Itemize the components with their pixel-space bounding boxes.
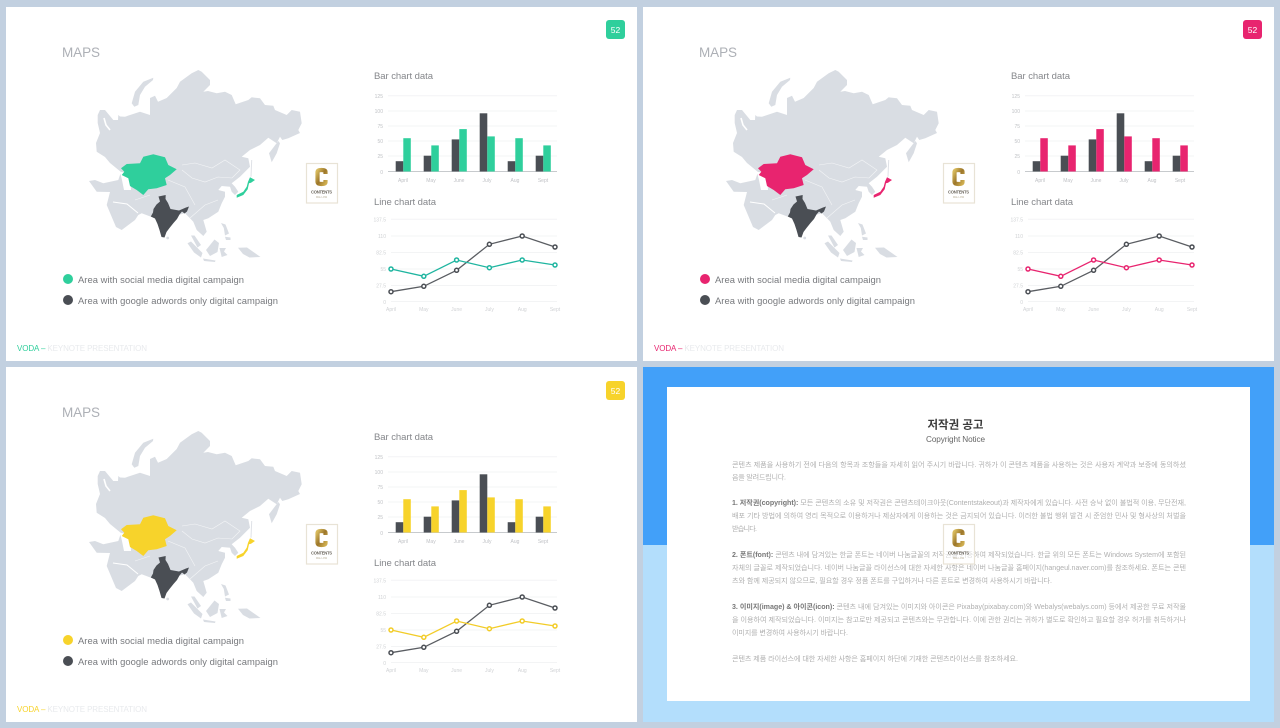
line chart: Line chart data xyxy=(1011,197,1074,208)
line chart: July xyxy=(485,668,494,674)
line chart: Sept xyxy=(550,307,561,313)
line chart: 137.5 xyxy=(373,218,386,224)
heading: copyright notice: Copyright Notice xyxy=(926,435,985,444)
bar chart: 75 xyxy=(377,124,383,130)
heading: MAPS: MAPS xyxy=(699,45,737,60)
bar chart: 75 xyxy=(377,485,383,491)
line chart xyxy=(1010,197,1198,313)
line chart: 0 xyxy=(383,661,386,667)
badge: page number xyxy=(1243,20,1262,39)
bar chart: Sept xyxy=(538,539,549,545)
text block: notice body: 음을 알려드립니다. xyxy=(732,472,786,482)
bar chart: 0 xyxy=(380,170,383,176)
heading: copyright notice: 저작권 공고 xyxy=(928,418,984,432)
logo: CONTENTS xyxy=(311,550,332,556)
text block: notice body: 받습니다. xyxy=(732,524,757,533)
bar chart: July xyxy=(483,539,492,545)
legend: Area with social media digital campaign xyxy=(78,635,244,646)
logo xyxy=(306,524,338,564)
map of Asia xyxy=(726,70,939,262)
panel: copyright notice xyxy=(643,367,1274,722)
bar chart xyxy=(374,71,557,184)
badge: page number xyxy=(606,20,625,39)
legend: Area with social media digital campaign xyxy=(78,274,244,285)
bar chart: Bar chart data xyxy=(1011,71,1071,82)
bar chart: 25 xyxy=(377,515,383,521)
map of Asia xyxy=(89,431,302,623)
line chart: Aug xyxy=(1155,307,1164,313)
panel: pink slide xyxy=(643,7,1274,361)
bar chart xyxy=(374,432,557,545)
footer: VODA – KEYNOTE PRESENTATION xyxy=(17,344,147,353)
line chart: 27.5 xyxy=(376,284,386,290)
logo: CONTENTS xyxy=(311,190,332,194)
logo: MAL LOW xyxy=(316,196,328,199)
legend xyxy=(700,274,915,306)
logo: CONTENTS xyxy=(948,190,969,194)
bar chart: Bar chart data xyxy=(374,71,434,82)
line chart xyxy=(373,558,561,674)
line chart: 27.5 xyxy=(376,644,386,650)
logo xyxy=(944,164,974,203)
line chart: June xyxy=(451,668,462,674)
text block: notice body: 자체의 글꼴로 제작되었습니다. 네이버 나눔글꼴 라이선스에 대한 자세한 사항은 네이버 나눔글꼴 홈페이지(hangeul.naver.com)를 참조하세요. 폰트는 콘텐 xyxy=(732,563,1186,572)
logo: MAL LOW xyxy=(953,196,965,199)
bar chart: April xyxy=(1035,178,1045,184)
bar chart: Sept xyxy=(538,178,549,184)
footer: VODA – KEYNOTE PRESENTATION xyxy=(17,705,147,714)
line chart: July xyxy=(1122,307,1131,313)
bar chart: 0 xyxy=(1017,170,1020,176)
bar chart: 125 xyxy=(375,455,383,461)
logo: MAL LOW xyxy=(316,557,328,560)
legend: Area with google adwords only digital campaign xyxy=(715,295,915,306)
bar chart: Sept xyxy=(1175,178,1186,184)
bar chart: Aug xyxy=(511,178,520,184)
panel: green slide xyxy=(6,7,637,361)
legend: Area with google adwords only digital campaign xyxy=(78,295,278,306)
line chart: 137.5 xyxy=(1010,218,1023,224)
badge: page number xyxy=(606,381,625,400)
bar chart: 50 xyxy=(377,139,383,145)
line chart: Sept xyxy=(1187,307,1198,313)
bar chart: May xyxy=(426,539,436,545)
line chart: 110 xyxy=(1015,234,1023,240)
bar chart: June xyxy=(454,178,465,184)
line chart: 55 xyxy=(380,628,386,634)
text block: notice body: 콘텐츠 제품 라이선스에 대한 자세한 사항은 홈페이지 하단에 기재한 콘텐츠라이선스를 참조하세요. xyxy=(732,654,1018,663)
logo xyxy=(306,164,338,203)
map of Asia xyxy=(89,70,302,262)
line chart: July xyxy=(485,307,494,313)
legend xyxy=(63,635,278,667)
panel: yellow slide xyxy=(6,367,637,722)
bar chart: 100 xyxy=(1012,109,1020,115)
bar chart: 75 xyxy=(1014,124,1020,130)
line chart: June xyxy=(451,307,462,313)
heading: MAPS: MAPS xyxy=(62,405,100,420)
line chart: 82.5 xyxy=(376,250,386,256)
line chart: Aug xyxy=(518,668,527,674)
bar chart: 125 xyxy=(375,94,383,100)
logo xyxy=(944,524,974,564)
bar chart: 50 xyxy=(1014,139,1020,145)
text block: notice body: 1. 저작권(copyright): 모든 콘텐츠의 소유 및 저작권은 콘텐츠테이크아웃(Contentstakeout)과 제작자에게 있습니다. 사전 승낙 없이 불법적 이용, 무단전재, xyxy=(732,498,1186,507)
bar chart: 25 xyxy=(1014,154,1020,160)
logo: MAL LOW xyxy=(953,557,965,560)
badge: page number: 52 xyxy=(611,25,620,35)
bar chart: July xyxy=(483,178,492,184)
badge: page number: 52 xyxy=(611,386,620,396)
logo: CONTENTS xyxy=(948,550,969,556)
line chart xyxy=(373,197,561,313)
bar chart: April xyxy=(398,178,408,184)
badge: page number: 52 xyxy=(1248,25,1257,35)
line chart: Sept xyxy=(550,668,561,674)
text block: notice body: 을 이용하여 제작되었습니다. 이미지는 참고로만 제공되고 콘텐츠와는 무관합니다. 이에 관한 권리는 귀하가 별도로 확인하고 필요할 경우 허가를 취득하거나 xyxy=(732,615,1186,624)
bar chart: Aug xyxy=(1148,178,1157,184)
line chart: April xyxy=(386,668,396,674)
text block: notice body: 배포 기타 방법에 의하여 영리 목적으로 이용하거나 제삼자에게 이용하는 것은 금지되어 있습니다. 이러한 불법 행위 발견 시 준엄한 민사 및 형사상의 처벌을 xyxy=(732,511,1186,520)
heading: MAPS: MAPS xyxy=(62,45,100,60)
text block: notice body: 2. 폰트(font): 콘텐츠 내에 담겨있는 한글 폰트는 네이버 나눔글꼴의 저작권을 기증하여 제작되었습니다. 한글 위의 모든 폰트는 Windows System에 포함된 xyxy=(732,550,1186,559)
bar chart: June xyxy=(1091,178,1102,184)
line chart: Line chart data xyxy=(374,197,437,208)
line chart: 55 xyxy=(380,267,386,273)
text block: notice body xyxy=(732,460,1186,663)
line chart: May xyxy=(419,307,429,313)
line chart: May xyxy=(419,668,429,674)
line chart: Aug xyxy=(518,307,527,313)
line chart: 110 xyxy=(378,234,386,240)
legend: Area with google adwords only digital campaign xyxy=(78,656,278,667)
line chart: 27.5 xyxy=(1013,284,1023,290)
text block: notice body: 이미지를 변경하여 사용하시기 바랍니다. xyxy=(732,628,848,637)
line chart: April xyxy=(386,307,396,313)
line chart: April xyxy=(1023,307,1033,313)
legend xyxy=(63,274,278,306)
bar chart: Bar chart data xyxy=(374,432,434,443)
bar chart: 50 xyxy=(377,500,383,506)
bar chart: 100 xyxy=(375,470,383,476)
bar chart: Aug xyxy=(511,539,520,545)
bar chart: July xyxy=(1120,178,1129,184)
text block: notice body: 3. 이미지(image) & 아이콘(icon): 콘텐츠 내에 담겨있는 이미지와 아이콘은 Pixabay(pixabay.com)와 Webalys(webalys.com) 등에서 제공한 무료 저작물 xyxy=(732,602,1186,611)
legend: Area with social media digital campaign xyxy=(715,274,881,285)
line chart: Line chart data xyxy=(374,558,437,569)
bar chart: 125 xyxy=(1012,94,1020,100)
line chart: 0 xyxy=(383,300,386,306)
bar chart: 0 xyxy=(380,531,383,537)
text block: notice body: 콘텐츠 제품을 사용하기 전에 다음의 항목과 조항들을 자세히 읽어 주시기 바랍니다. 귀하가 이 콘텐츠 제품을 사용하는 것은 사용자 계약과 보증에 동의하셨 xyxy=(732,460,1186,469)
bar chart: May xyxy=(426,178,436,184)
line chart: 0 xyxy=(1020,300,1023,306)
bar chart xyxy=(1011,71,1194,184)
text block: notice body: 츠와 함께 제공되지 않으므로, 필요할 경우 정품 폰트를 구입하거나 다른 폰트로 변경하여 사용하시기 바랍니다. xyxy=(732,576,1052,585)
line chart: 82.5 xyxy=(1013,250,1023,256)
heading: copyright notice xyxy=(926,418,985,444)
line chart: May xyxy=(1056,307,1066,313)
bar chart: April xyxy=(398,539,408,545)
line chart: June xyxy=(1088,307,1099,313)
bar chart: 100 xyxy=(375,109,383,115)
bar chart: 25 xyxy=(377,154,383,160)
line chart: 137.5 xyxy=(373,578,386,584)
bar chart: June xyxy=(454,539,465,545)
line chart: 110 xyxy=(378,595,386,601)
footer: VODA – KEYNOTE PRESENTATION xyxy=(654,344,784,353)
bar chart: May xyxy=(1063,178,1073,184)
line chart: 55 xyxy=(1017,267,1023,273)
line chart: 82.5 xyxy=(376,612,386,618)
